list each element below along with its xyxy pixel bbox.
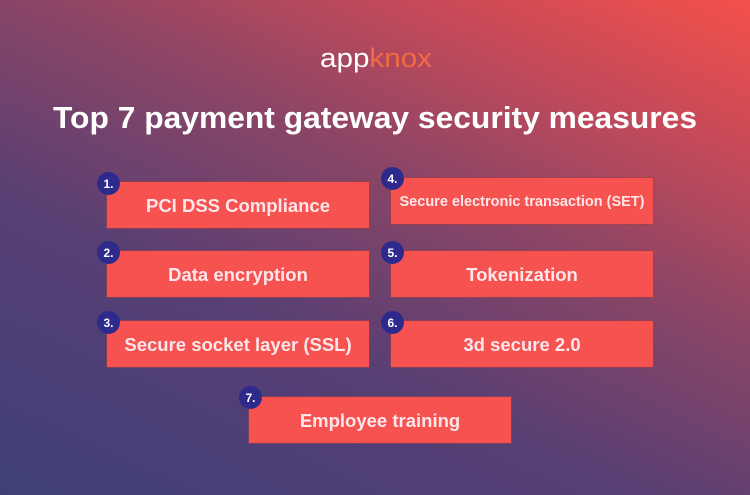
badge 5 [381,241,404,264]
badge 3: 3. [103,316,114,330]
badge 1: 1. [103,176,114,190]
item 6 [391,321,653,367]
badge 2: 2. [103,246,114,260]
logo text: appknox [320,43,433,73]
badge 3 [97,311,120,334]
item 1: PCI DSS Compliance [146,195,330,216]
badge 2 [97,241,120,264]
badge 1 [97,172,120,195]
item 2 [107,251,369,297]
item 5: Tokenization [466,264,578,285]
item 4 [391,178,653,224]
item 4: Secure electronic transaction (SET) [400,194,644,210]
item 6: 3d secure 2.0 [463,334,581,355]
item 7 [249,397,511,443]
item 2: Data encryption [168,264,308,285]
badge 6: 6. [387,316,398,330]
item 1 [107,182,369,228]
badge 4 [381,167,404,190]
badge 4: 4. [387,172,398,186]
item 3 [107,321,369,367]
badge 5: 5. [387,246,398,260]
badge 7: 7. [245,390,256,404]
badge 7 [239,386,262,409]
badge 6 [381,311,404,334]
title: Top 7 payment gateway security measures [53,100,697,135]
item 3: Secure socket layer (SSL) [124,334,352,355]
item 5 [391,251,653,297]
item 7: Employee training [300,410,460,431]
